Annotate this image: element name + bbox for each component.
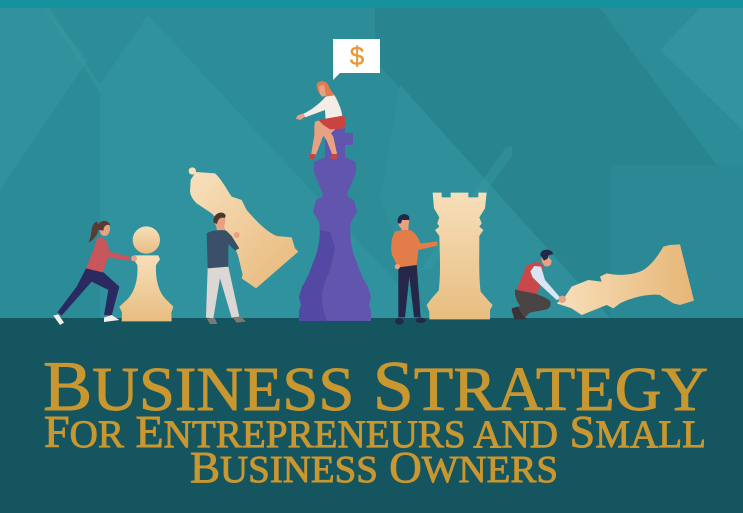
ground xyxy=(0,318,743,513)
person: man lifting bishop xyxy=(206,213,246,324)
speech bubble with dollar sign: $ xyxy=(350,41,365,71)
person: woman seated on king xyxy=(296,81,346,159)
title line 1: BUSINESS STRATEGY xyxy=(43,348,708,426)
speech bubble with dollar sign xyxy=(333,39,380,80)
chess piece: fallen queen xyxy=(557,244,694,315)
person: woman pushing pawn xyxy=(53,221,137,325)
chess piece: fallen bishop xyxy=(189,167,298,288)
title xyxy=(43,348,708,492)
background panel xyxy=(0,0,743,318)
person: man in orange sweater xyxy=(391,214,437,325)
chess piece: purple king xyxy=(299,128,371,321)
chess piece: pawn xyxy=(119,226,173,321)
title line 3: BUSINESS OWNERS xyxy=(190,443,558,492)
title line 2: FOR ENTREPRENEURS AND SMALL xyxy=(44,406,706,457)
person: crouching man in red vest xyxy=(512,250,566,319)
chess piece: rook xyxy=(427,193,493,319)
